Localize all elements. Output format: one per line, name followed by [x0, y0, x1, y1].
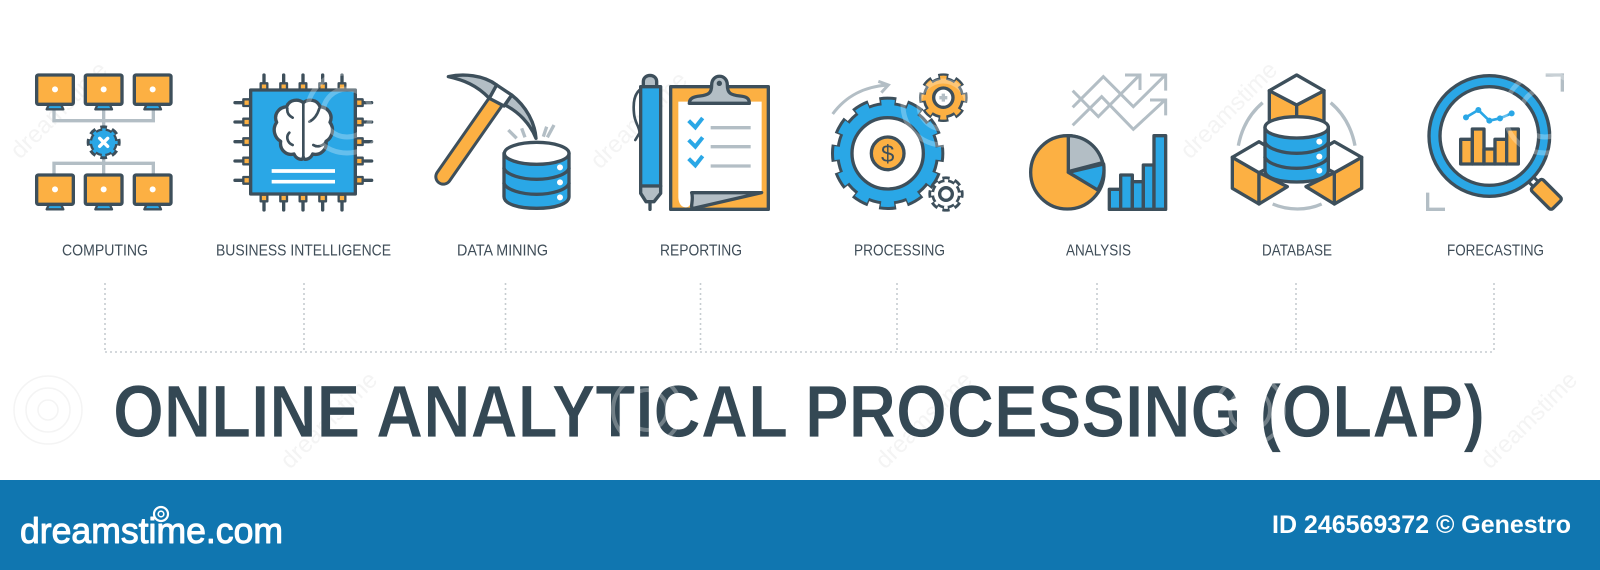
label: database: DATABASE — [1262, 242, 1332, 260]
footer logo: dreamstime.com: dreamstime.com — [20, 510, 283, 551]
text: dreamstime — [1175, 56, 1283, 164]
icon: data mining pickaxe and database — [443, 75, 569, 208]
label: business intelligence: BUSINESS INTELLIGENCE — [216, 242, 391, 260]
label: forecasting: FORECASTING — [1447, 242, 1544, 260]
connector: dotted bracket — [105, 283, 1494, 352]
label: processing: PROCESSING — [854, 242, 945, 260]
small white gear — [931, 179, 961, 209]
label: computing: COMPUTING — [62, 242, 148, 260]
footer bar — [0, 480, 1600, 570]
text: dreamstime — [5, 56, 113, 164]
icon: forecasting magnifier — [1428, 75, 1562, 210]
main blue gear: $ — [881, 141, 894, 168]
label: data mining: DATA MINING — [457, 242, 548, 260]
text: dreamstime — [585, 66, 693, 174]
label: reporting: REPORTING — [660, 242, 742, 260]
footer credit: image id: ID 246569372 © Genestro — [1272, 511, 1571, 539]
text: dreamstime — [870, 366, 978, 474]
text: dreamstime — [275, 366, 383, 474]
small orange gear — [922, 77, 964, 119]
icon: database cubes and cylinder — [1232, 75, 1362, 209]
icon: processing gears — [833, 77, 964, 209]
label: analysis: ANALYSIS — [1066, 242, 1131, 260]
icon: computing network — [37, 75, 171, 209]
icon: reporting pen and clipboard — [634, 75, 768, 209]
icon: business intelligence chip — [235, 75, 372, 210]
icon: analysis charts — [1031, 75, 1166, 209]
text: dreamstime — [1475, 366, 1583, 474]
